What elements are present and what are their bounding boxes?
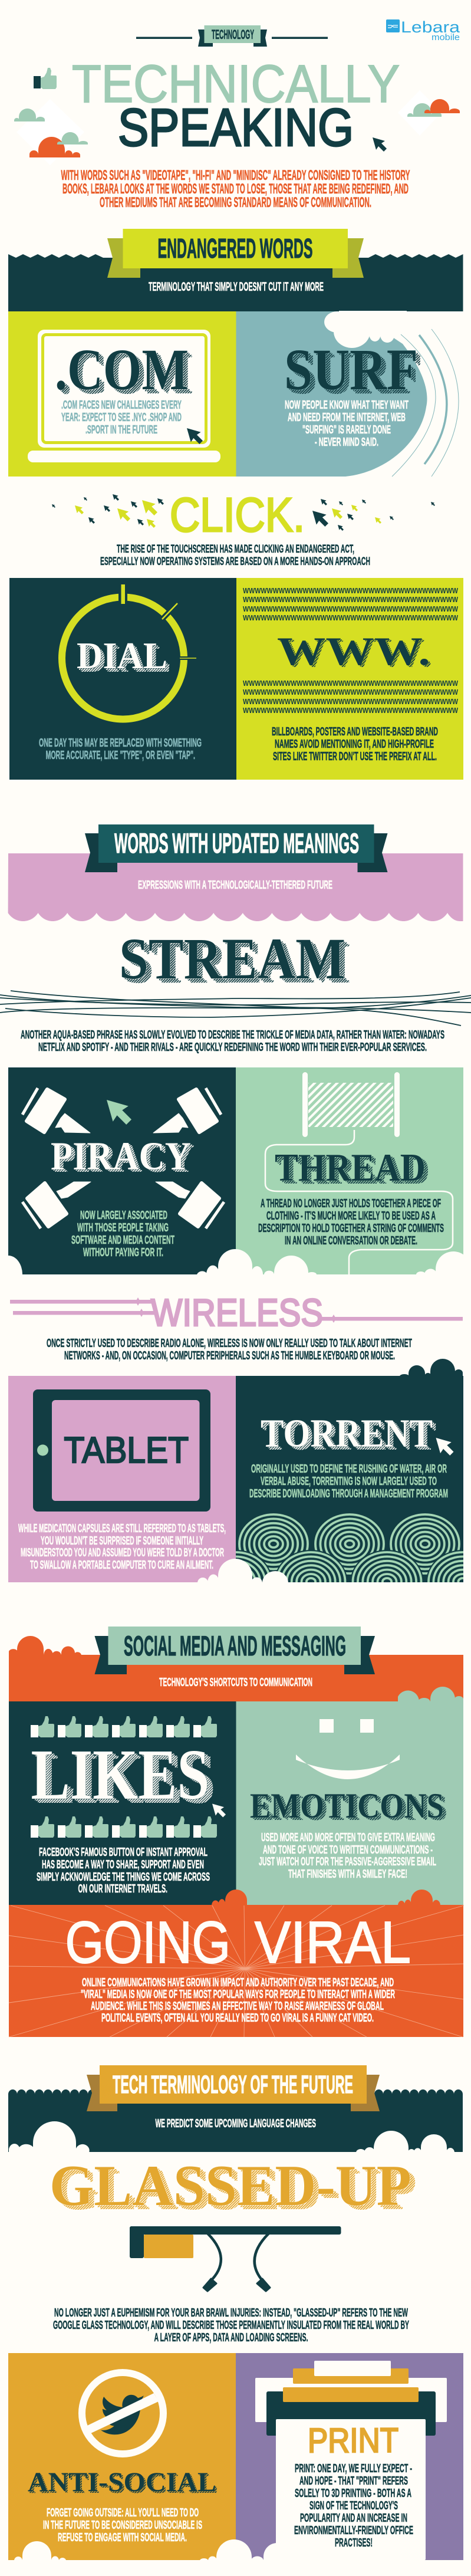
- title: [72, 55, 400, 157]
- clouds over tablet and torrent panels: [197, 1559, 288, 1583]
- subheading: TECHNOLOGY'S SHORTCUTS TO COMMUNICATION: [159, 1676, 312, 1689]
- title: tablet: TABLET: [64, 1430, 189, 1471]
- dark band with scalloped top: [8, 2089, 463, 2152]
- banner: endangered words: [107, 229, 364, 278]
- text: wireless: [47, 1337, 412, 1362]
- title: surf: SURF: [284, 337, 418, 402]
- text: likes: FACEBOOK'S FAMOUS BUTTON OF INSTANT APPROVAL: [39, 1846, 207, 1859]
- panel: piracy: [8, 1067, 236, 1274]
- title: dial: DIAL: [77, 635, 167, 676]
- icon: cursor: [436, 1438, 454, 1455]
- panel: surf: [236, 311, 459, 477]
- text: tablet: YOU WOULDN'T BE SURPRISED IF SOMEONE INITIALLY: [41, 1535, 203, 1547]
- text: stream: [21, 1029, 444, 1054]
- title: piracy: PIRACY: [51, 1133, 191, 1178]
- orange cloud left: [9, 1636, 81, 1657]
- title: TECHNICALLY: [72, 55, 400, 114]
- text: piracy: [71, 1209, 174, 1259]
- text: www: [272, 725, 438, 763]
- text: print: [294, 2462, 413, 2549]
- icon: smiley face: [296, 1719, 400, 1779]
- white diamonds behind clouds: [17, 90, 442, 165]
- title: glassed-up: GLASSED-UP: [52, 2156, 414, 2220]
- text: .com: [61, 399, 182, 436]
- text: tablet: TO SWALLOW A PORTABLE COMPUTER TO CURE AN AILMENT.: [30, 1559, 213, 1572]
- text: likes: [37, 1846, 210, 1895]
- zigzag band: [8, 254, 463, 311]
- title: torrent: TORRENT: [261, 1411, 433, 1455]
- title: stream: STREAM: [124, 930, 351, 995]
- icon: printer: [255, 2361, 447, 2560]
- banner: endangered words: ENDANGERED WORDS: [158, 233, 312, 264]
- orange clouds rising into panels: [212, 1890, 440, 1905]
- subheading: WE PREDICT SOME UPCOMING LANGUAGE CHANGES: [156, 2117, 316, 2130]
- mint cloud: [398, 1687, 463, 1707]
- text: piracy: WITHOUT PAYING FOR IT.: [83, 1246, 163, 1259]
- text: .com: .SPORT IN THE FUTURE: [85, 423, 157, 436]
- title: going viral: [65, 1910, 411, 1976]
- title: thread: THREAD: [279, 1149, 430, 1192]
- text: going viral: [81, 1976, 395, 2025]
- text: glassed-up: A LAYER OF APPS, DATA AND LOADING SCREENS.: [154, 2331, 308, 2344]
- text: torrent: [249, 1463, 448, 1500]
- panel: likes: [9, 1701, 236, 1905]
- technology ribbon: [136, 25, 328, 47]
- icon: tablet: [33, 1389, 210, 1512]
- logo: Lebara mobile: Lebara: [401, 18, 460, 36]
- section: endangered words: [8, 229, 463, 780]
- icon: clouds left: [14, 109, 88, 157]
- icon: cursor: [187, 428, 203, 444]
- title: .com: .COM: [55, 337, 189, 402]
- dark cloud above torrent panel: [400, 1359, 463, 1376]
- title: www: WWW.: [277, 629, 430, 673]
- title: thread: THREAD: [277, 1148, 428, 1191]
- title: torrent: TORRENT: [262, 1412, 434, 1457]
- title: .com: .COM: [60, 341, 193, 406]
- title: anti-social: ANTI-SOCIAL: [29, 2469, 218, 2499]
- panel: tablet: [8, 1376, 236, 1582]
- title: going viral: GOING: [65, 1910, 230, 1976]
- title: emoticons: EMOTICONS: [252, 1788, 446, 1826]
- text: surf: - NEVER MIND SAID.: [315, 436, 378, 449]
- text: dial: ONE DAY THIS MAY BE REPLACED WITH SOMETHING: [39, 737, 202, 750]
- header section: [14, 18, 460, 211]
- icon: cursor: [107, 1100, 131, 1125]
- panel: dial: [9, 578, 236, 780]
- text: dial: [39, 737, 202, 762]
- icon: clouds right: [407, 99, 460, 117]
- clouds at bottom of panels: [14, 2539, 277, 2561]
- clouds on dark band: [9, 2121, 454, 2153]
- title: wireless: WIRELESS: [151, 1291, 323, 1334]
- orange band: [9, 1655, 463, 1701]
- title: print: PRINT: [308, 2421, 398, 2460]
- title: www: WWW.: [279, 630, 433, 675]
- icon: thumbs up: [34, 68, 57, 89]
- text rows: w pattern top: [243, 586, 459, 622]
- icon: cursor: [373, 137, 387, 152]
- title: anti-social: ANTI-SOCIAL: [28, 2467, 216, 2498]
- title: dial: DIAL: [78, 636, 169, 678]
- text: emoticons: [259, 1831, 436, 1881]
- title: emoticons: EMOTICONS: [253, 1789, 447, 1828]
- text: likes: ON OUR INTERNET TRAVELS.: [78, 1882, 167, 1895]
- banner: words with updated meanings: [85, 824, 388, 872]
- text: anti-social: [43, 2506, 202, 2544]
- title: dial: DIAL: [80, 638, 171, 680]
- text: click: [100, 543, 370, 568]
- title: torrent: TORRENT: [264, 1414, 436, 1458]
- intro text: [61, 167, 410, 211]
- text: .com: YEAR: EXPECT TO SEE .NYC .SHOP AND: [61, 411, 182, 424]
- panel: www: [236, 578, 463, 780]
- text rows: w pattern bottom: [243, 679, 459, 715]
- title: glassed-up: GLASSED-UP: [55, 2158, 417, 2222]
- banner: tech terminology of the future: [87, 2065, 380, 2111]
- panel: torrent: [236, 1376, 463, 1582]
- panel: .com: [8, 311, 236, 477]
- text: piracy: WITH THOSE PEOPLE TAKING: [77, 1221, 169, 1234]
- title: emoticons: EMOTICONS: [250, 1786, 444, 1825]
- title: .com: .COM: [57, 339, 191, 405]
- text: .com: .COM FACES NEW CHALLENGES EVERY: [61, 399, 182, 412]
- icon: stream lines: [0, 991, 471, 1026]
- text: glassed-up: [53, 2306, 409, 2344]
- icon: torrent waves: [236, 1513, 463, 1582]
- text: surf: [285, 399, 409, 449]
- title: likes: LIKES: [34, 1737, 212, 1816]
- title: anti-social: ANTI-SOCIAL: [28, 2467, 217, 2498]
- icon: google glass: [130, 2226, 341, 2291]
- title: click: CLICK.: [170, 488, 305, 542]
- title: surf: SURF: [289, 341, 423, 406]
- banner: social media and messaging: [94, 1627, 375, 1674]
- text: thread: [258, 1197, 444, 1247]
- icon: cursors: [52, 494, 435, 531]
- text: tablet: [18, 1522, 226, 1572]
- wireless section: [10, 1291, 463, 1362]
- icon: dial ring: [62, 584, 196, 719]
- rays: [9, 1905, 464, 2037]
- title: likes: LIKES: [37, 1739, 216, 1819]
- wave: [236, 311, 459, 477]
- title: piracy: PIRACY: [54, 1136, 195, 1181]
- text: dial: MORE ACCURATE, LIKE "TYPE", OR EVEN "TAP".: [46, 749, 195, 762]
- text: surf: "SURFING" IS RARELY DONE: [302, 423, 391, 436]
- icon row: thumbs up top: [31, 1716, 217, 1737]
- section: tech terminology of the future: [8, 2065, 463, 2561]
- text: piracy: SOFTWARE AND MEDIA CONTENT: [71, 1234, 174, 1247]
- icon: laptop: [28, 330, 220, 462]
- title: piracy: PIRACY: [52, 1135, 193, 1179]
- text: anti-social: REFUSE TO ENGAGE WITH SOCIAL MEDIA.: [58, 2531, 187, 2544]
- panel: print: [236, 2353, 463, 2560]
- logo: Lebara mobile: mobile: [432, 32, 460, 42]
- text: piracy: NOW LARGELY ASSOCIATED: [80, 1209, 167, 1222]
- panel: anti-social: [8, 2353, 236, 2560]
- icon: no twitter: [82, 2373, 163, 2454]
- section: words with updated meanings: [0, 824, 471, 2561]
- text: print: PRACTISES!: [335, 2536, 373, 2549]
- icon: pirate swords: [22, 1088, 224, 1228]
- icon row: thumbs up bottom: [31, 1816, 217, 1838]
- panel: emoticons: [236, 1701, 463, 1905]
- text: tablet: MISUNDERSTOOD YOU AND ASSUMED YOU WERE TOLD BY A DOCTOR: [21, 1546, 224, 1559]
- section: social media and messaging: [9, 1627, 464, 2037]
- title: likes: LIKES: [31, 1735, 210, 1815]
- title: surf: SURF: [286, 339, 420, 405]
- text: likes: HAS BECOME A WAY TO SHARE, SUPPORT AND EVEN: [42, 1858, 204, 1871]
- text: likes: SIMPLY ACKNOWLEDGE THE THINGS WE COME ACROSS: [37, 1871, 210, 1884]
- icon: spool of thread: [265, 1072, 453, 1274]
- click section: [52, 488, 435, 568]
- panel: thread: [236, 1067, 463, 1274]
- icon: wireless signal lines: [10, 1297, 463, 1323]
- clouds over panels: [8, 1249, 471, 1274]
- technology ribbon: TECHNOLOGY: [212, 27, 254, 42]
- title: going viral: VIRAL: [255, 1910, 411, 1976]
- scalloped band: [8, 853, 463, 921]
- title: SPEAKING: [118, 98, 354, 157]
- title: glassed-up: GLASSED-UP: [50, 2154, 411, 2218]
- title: thread: THREAD: [275, 1146, 426, 1190]
- title: stream: STREAM: [121, 928, 348, 993]
- title: www: WWW.: [278, 630, 432, 675]
- text: anti-social: IN THE FUTURE TO BE CONSIDERED UNSOCIABLE IS: [43, 2519, 202, 2532]
- icon: cursor: [212, 1803, 226, 1818]
- logo: Lebara mobile: [386, 18, 460, 42]
- text: tablet: WHILE MEDICATION CAPSULES ARE STILL REFERRED TO AS TABLETS,: [18, 1522, 226, 1535]
- panel: going viral: [9, 1890, 464, 2037]
- text: anti-social: FORGET GOING OUTSIDE: ALL YOU'LL NEED TO DO: [47, 2506, 199, 2519]
- title: stream: STREAM: [119, 926, 345, 991]
